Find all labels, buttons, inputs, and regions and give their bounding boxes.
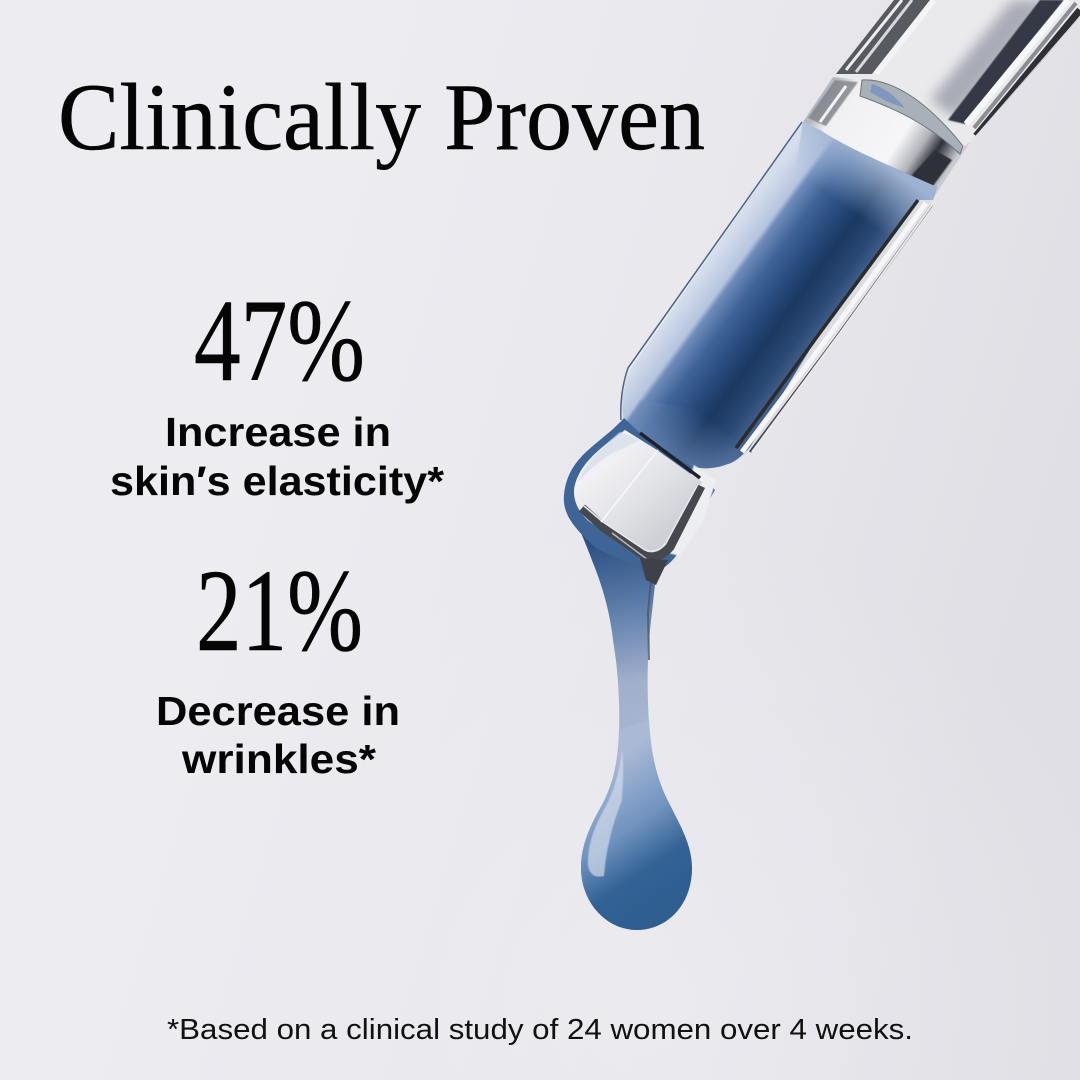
tip dark rim xyxy=(582,484,701,560)
blue serum column xyxy=(622,122,937,468)
tip seam xyxy=(601,450,658,522)
label: decrease in wrinkles xyxy=(156,688,400,782)
label: increase in skin's elasticity: Increase in xyxy=(165,409,391,455)
glass ring xyxy=(860,80,963,154)
serum edge lines xyxy=(621,122,802,420)
outer glass right wall xyxy=(728,196,934,464)
label: increase in skin's elasticity xyxy=(110,409,444,504)
stream shadow below tip xyxy=(640,558,668,585)
stat: 47%: 47% xyxy=(194,275,365,406)
stat: 21%: 21% xyxy=(196,545,363,676)
tip upper white reflection xyxy=(578,432,640,482)
serum shading near meniscus xyxy=(790,122,937,250)
glass wall reflections xyxy=(736,200,934,452)
dropper illustration xyxy=(564,0,1080,930)
drop and stream of serum xyxy=(566,495,692,930)
title: Clinically Proven xyxy=(58,64,705,170)
glass tip xyxy=(574,430,702,556)
serum shading near base xyxy=(625,400,770,468)
right glass halo xyxy=(664,465,716,556)
upper glass tube xyxy=(836,0,1080,136)
glass neck above the serum xyxy=(803,77,970,197)
glass bulb with serum film xyxy=(564,418,715,572)
label: decrease in wrinkles: wrinkles* xyxy=(181,736,376,782)
tip shoulder line xyxy=(640,433,700,478)
label: decrease in wrinkles: Decrease in xyxy=(156,688,400,734)
label: increase in skin's elasticity: skin′s elasticity* xyxy=(110,458,444,504)
footnote: *Based on a clinical study of 24 women over 4 weeks. xyxy=(167,1014,913,1046)
